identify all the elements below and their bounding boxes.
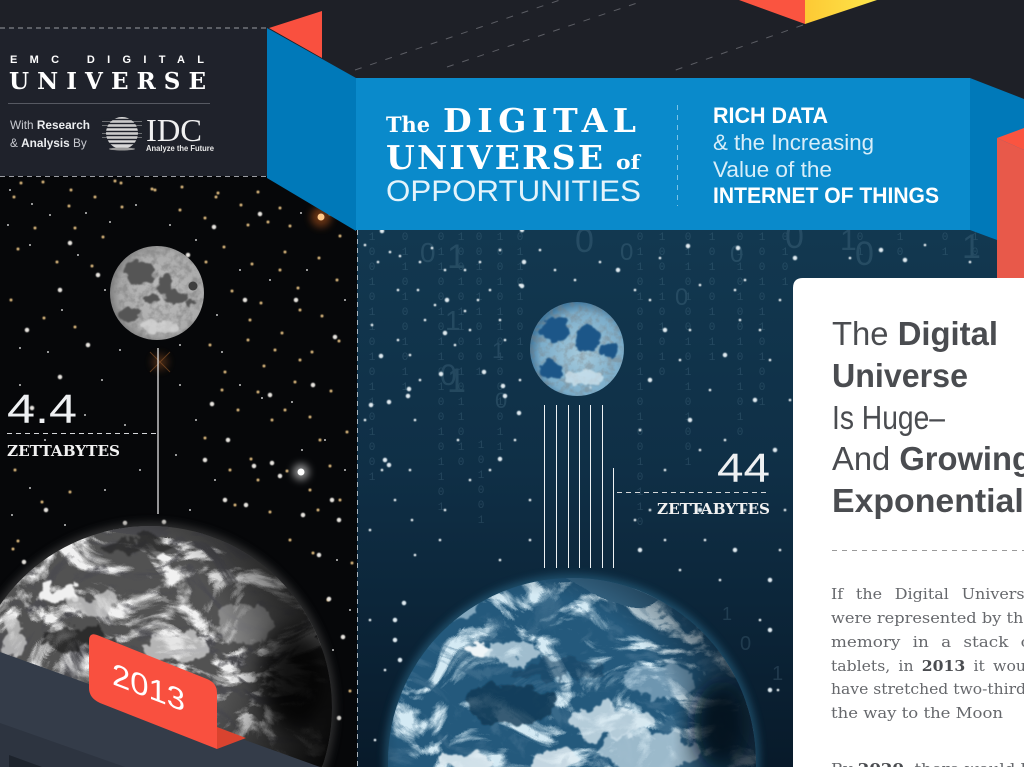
binary code rain: 0 bbox=[855, 235, 874, 273]
binary code rain: 100101101001 bbox=[756, 232, 768, 412]
banner title: OPPORTUNITIES bbox=[386, 175, 641, 208]
banner title bbox=[386, 101, 642, 208]
callout: 4.4 zettabytes: ZETTABYTES bbox=[7, 442, 120, 460]
panel: 2020 starfield bbox=[357, 218, 997, 767]
binary code rain: 1001101010 bbox=[656, 232, 668, 382]
callout: 44 zettabytes: ZETTABYTES bbox=[657, 500, 770, 518]
research credit bbox=[10, 118, 90, 150]
binary code rain: 0 bbox=[495, 388, 507, 413]
moon 2020 bbox=[530, 302, 624, 396]
bright star flare bbox=[311, 207, 331, 227]
logo title bbox=[9, 54, 206, 95]
vertical dashed divider bbox=[356, 230, 358, 767]
binary code rain: 1 bbox=[447, 362, 466, 400]
binary code rain: 0101 bbox=[779, 232, 791, 292]
card heading: Is Huge– bbox=[832, 400, 945, 437]
callout: 44 zettabytes: 44 bbox=[717, 445, 770, 491]
logo title: UNIVERSE bbox=[9, 68, 206, 95]
card body text: If the Digital Universe bbox=[831, 587, 1024, 603]
panel: text card bbox=[793, 278, 1024, 767]
left fold of banner bbox=[267, 28, 356, 231]
IDC logo: Analyze the Future bbox=[146, 144, 215, 153]
earth 2020 bbox=[384, 574, 760, 767]
binary code rain: 0010110101 bbox=[473, 232, 485, 382]
panel: 2013 starfield bbox=[0, 176, 357, 767]
panel: logo block bbox=[0, 28, 268, 176]
binary code rain: 0110100101101001 bbox=[682, 232, 694, 472]
callout: 4.4 zettabytes: 4.4 bbox=[7, 386, 77, 432]
binary code rain: 01101001011010 bbox=[734, 232, 746, 442]
binary code rain: 0 bbox=[420, 237, 436, 268]
binary code rain: 1 bbox=[840, 224, 857, 257]
card heading: The Digital bbox=[832, 316, 998, 353]
card body text: the way to the Moon bbox=[831, 706, 1003, 722]
binary code rain: 01 bbox=[939, 232, 951, 262]
earth 2013 bbox=[0, 522, 336, 767]
banner subtitle bbox=[713, 103, 939, 208]
star behind moon line bbox=[150, 352, 170, 372]
binary code rain: 01 bbox=[854, 232, 866, 262]
banner title: of bbox=[616, 150, 642, 174]
card body text: were represented by the bbox=[831, 611, 1024, 627]
warm stars 2013 bbox=[11, 181, 352, 701]
dashed diagonal lines bbox=[355, 0, 803, 72]
callout: 44 zettabytes bbox=[544, 405, 770, 568]
bright star white bbox=[293, 464, 309, 480]
binary code rain: 0 bbox=[620, 239, 633, 266]
white stars 2013 bbox=[24, 214, 343, 718]
card body text bbox=[831, 587, 1024, 767]
binary code rain: 0 bbox=[440, 359, 457, 392]
banner subtitle: & the Increasing bbox=[713, 130, 874, 155]
research credit: & Analysis By bbox=[10, 136, 87, 150]
card body text: have stretched two-thirds bbox=[831, 682, 1024, 698]
binary code rain: 1 bbox=[772, 663, 783, 685]
logo title: EMC DIGITAL bbox=[10, 54, 204, 66]
binary code rain bbox=[366, 218, 981, 685]
card heading bbox=[832, 316, 1024, 520]
dark slab foreground bbox=[0, 652, 320, 767]
binary code rain: 1 bbox=[447, 238, 466, 276]
binary code rain: 0 bbox=[575, 222, 594, 260]
binary code rain: 100101101001011 bbox=[494, 232, 506, 457]
binary code rain: 101001011 bbox=[706, 232, 718, 367]
binary code rain: 1 bbox=[962, 228, 981, 266]
banner subtitle: RICH DATA bbox=[713, 103, 828, 128]
banner title: The bbox=[386, 112, 430, 137]
binary code rain: 0 bbox=[675, 284, 688, 311]
card body text: memory in a stack of bbox=[831, 635, 1024, 651]
binary code rain: 1 bbox=[492, 338, 504, 363]
right fold of banner bbox=[970, 78, 1024, 250]
year ribbon 2013: 2013 bbox=[112, 656, 185, 719]
stars 2020 bbox=[371, 230, 905, 690]
binary code rain: 10 bbox=[969, 232, 981, 262]
banner title: UNIVERSE bbox=[386, 138, 603, 177]
red side block bbox=[997, 128, 1024, 278]
binary code rain: 0 bbox=[785, 218, 804, 256]
banner title: DIGITAL bbox=[443, 101, 636, 140]
binary code rain: 011010010 bbox=[514, 232, 526, 367]
banner bbox=[356, 78, 970, 230]
binary code rain: 01101001011 bbox=[399, 232, 411, 397]
top corner red triangle bbox=[269, 11, 322, 58]
binary code rain: 1 bbox=[722, 604, 732, 624]
binary code rain: 0 bbox=[730, 241, 743, 268]
binary code rain: 0110010110100101101 bbox=[435, 232, 447, 517]
binary code rain: 1 bbox=[445, 305, 461, 336]
binary code rain: 01101001011010010110 bbox=[634, 232, 646, 532]
banner subtitle: INTERNET OF THINGS bbox=[713, 183, 939, 208]
binary code rain: 0 bbox=[740, 633, 751, 655]
top coloured cube bbox=[739, 0, 877, 24]
card heading: Universe bbox=[832, 358, 968, 395]
binary code rain: 101001 bbox=[475, 440, 487, 530]
research credit: With Research bbox=[10, 118, 90, 132]
binary code rain: 1001011001011010 bbox=[455, 232, 467, 472]
moon 2013 bbox=[110, 246, 204, 340]
banner subtitle: Value of the bbox=[713, 157, 832, 182]
callout: 4.4 zettabytes bbox=[7, 348, 158, 514]
year ribbon 2013 bbox=[89, 634, 246, 749]
IDC logo: IDC bbox=[146, 112, 202, 148]
binary code rain: 10010110101101001 bbox=[366, 232, 378, 487]
binary code rain: 10 bbox=[894, 232, 906, 262]
IDC logo bbox=[101, 112, 215, 153]
